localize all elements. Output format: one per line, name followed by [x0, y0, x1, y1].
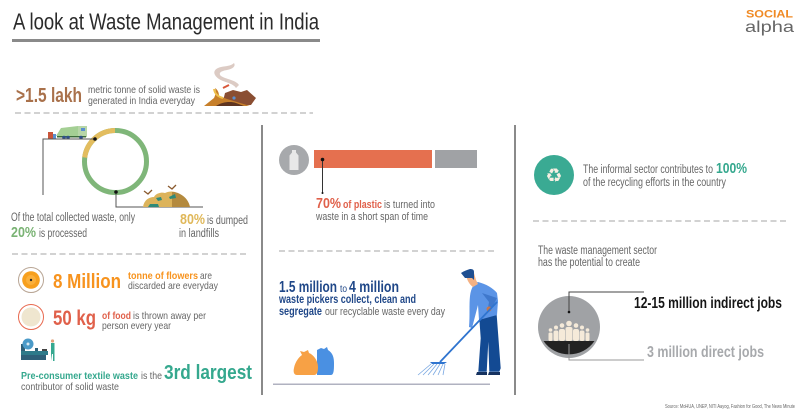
- text: food description: of food: [102, 310, 131, 322]
- text: 3rd largest: Pre-consumer textile waste: [21, 370, 138, 382]
- icon: smoking waste pile: [204, 63, 256, 106]
- text: 3rd largest: [21, 362, 252, 393]
- text: food description: person every year: [102, 320, 171, 332]
- text: flowers description: discarded are everyday: [128, 280, 219, 292]
- logo: Social Alpha: alpha: [745, 19, 794, 36]
- icon: recycle: ♻: [545, 165, 563, 187]
- stat: 1.5 lakh: >1.5 lakh: [16, 85, 82, 107]
- text: waste pickers: [278, 279, 445, 318]
- text: 20% processed: 20%: [11, 224, 36, 241]
- panel: plastic: [279, 145, 477, 223]
- panel: waste pickers: [278, 269, 501, 375]
- icon: man raking: [418, 269, 501, 375]
- text: 80% landfills: 80%: [180, 211, 205, 228]
- man: torso: [469, 282, 498, 328]
- chart: people circle: [538, 296, 600, 358]
- text: 3rd largest: is the: [141, 370, 162, 382]
- logo: Social Alpha: SOCIAL: [746, 8, 793, 20]
- icon: plate of food: [18, 304, 44, 330]
- panel: daily solid waste: [16, 63, 256, 107]
- chart: ring 20 / 80: [84, 130, 146, 192]
- stat: direct jobs: 3 million direct jobs: [647, 344, 764, 361]
- leader: landfills: [114, 190, 203, 207]
- panel: collected waste ring: [11, 126, 248, 241]
- man: legs: [478, 315, 501, 372]
- text: 70% plastic: of plastic: [343, 199, 382, 211]
- icon: garbage bags: [294, 347, 334, 375]
- stat: 8 million: 8 Million: [53, 271, 121, 293]
- title: A look at Waste Management in India: [13, 8, 319, 34]
- text: 3rd largest: contributor of solid waste: [21, 381, 119, 393]
- leader: plastic: [321, 158, 324, 194]
- text: jobs intro: has the potential to create: [538, 257, 640, 269]
- logo: Social Alpha: [745, 8, 794, 36]
- text: 80% landfills: [179, 211, 248, 240]
- text: metric tonne description: generated in India everyday: [88, 95, 196, 107]
- icon: garbage truck: [48, 126, 87, 139]
- text: 20% processed: [11, 212, 135, 241]
- panel: informal sector: [534, 155, 747, 195]
- text: 80% landfills: is dumped: [207, 215, 248, 227]
- panel: jobs: [538, 245, 782, 361]
- man: face: [466, 273, 478, 287]
- text: 20% processed: Of the total collected waste, only: [11, 212, 135, 224]
- text: jobs intro: The waste management sector: [538, 245, 657, 257]
- panel: textile: [21, 338, 252, 393]
- leader: indirect jobs: [568, 292, 644, 313]
- stat: 50 kg: 50 kg: [53, 307, 96, 330]
- text: waste pickers: our recyclable waste every day: [325, 306, 445, 318]
- panel: food: [18, 304, 206, 332]
- icon: flower: [18, 268, 44, 292]
- text: 70% plastic: [315, 195, 435, 223]
- bar chart: 70 percent: [314, 150, 477, 168]
- text: informal sector: [583, 160, 747, 189]
- text: flowers description: tonne of flowers: [128, 270, 198, 282]
- text: flowers description: [128, 270, 219, 292]
- text: 70% plastic: waste in a short span of time: [315, 211, 428, 223]
- text: food description: is thrown away per: [133, 310, 206, 322]
- text: waste pickers: 4 million: [349, 279, 399, 296]
- text: waste pickers: waste pickers collect, clean and: [278, 294, 416, 306]
- text: 3rd largest: 3rd largest: [164, 362, 252, 384]
- icon: bottle: [279, 145, 309, 175]
- text: 80% landfills: in landfills: [179, 228, 219, 240]
- text: flowers description: are: [200, 270, 212, 282]
- text: waste pickers: to: [340, 284, 347, 295]
- title: [12, 8, 320, 42]
- man: arm shade: [482, 293, 497, 308]
- text: metric tonne description: metric tonne of solid waste is: [88, 84, 200, 96]
- text: jobs intro: [538, 245, 657, 269]
- leader: processed: [43, 137, 97, 195]
- man: hair: [461, 269, 474, 280]
- text: waste pickers: segregate: [279, 306, 322, 318]
- text: informal sector: of the recycling efforts in the country: [583, 177, 726, 189]
- text: 70% plastic: is turned into: [384, 199, 435, 211]
- icon: landfill mound: [143, 185, 190, 207]
- icon: textile machine and worker: [21, 338, 54, 361]
- text: 70% plastic: 70%: [316, 195, 341, 212]
- leader: direct jobs: [569, 344, 644, 360]
- text: metric tonne description: [88, 84, 200, 107]
- text: 20% processed: is processed: [39, 228, 87, 240]
- text: food description: [102, 310, 206, 332]
- text: informal sector: The informal sector contributes to: [583, 164, 713, 176]
- man: shoes: [476, 372, 500, 375]
- text: waste pickers: 1.5 million: [279, 279, 337, 296]
- panel: flowers: [18, 268, 219, 293]
- icon: recycle: [534, 155, 574, 195]
- text: informal sector: 100%: [716, 160, 747, 177]
